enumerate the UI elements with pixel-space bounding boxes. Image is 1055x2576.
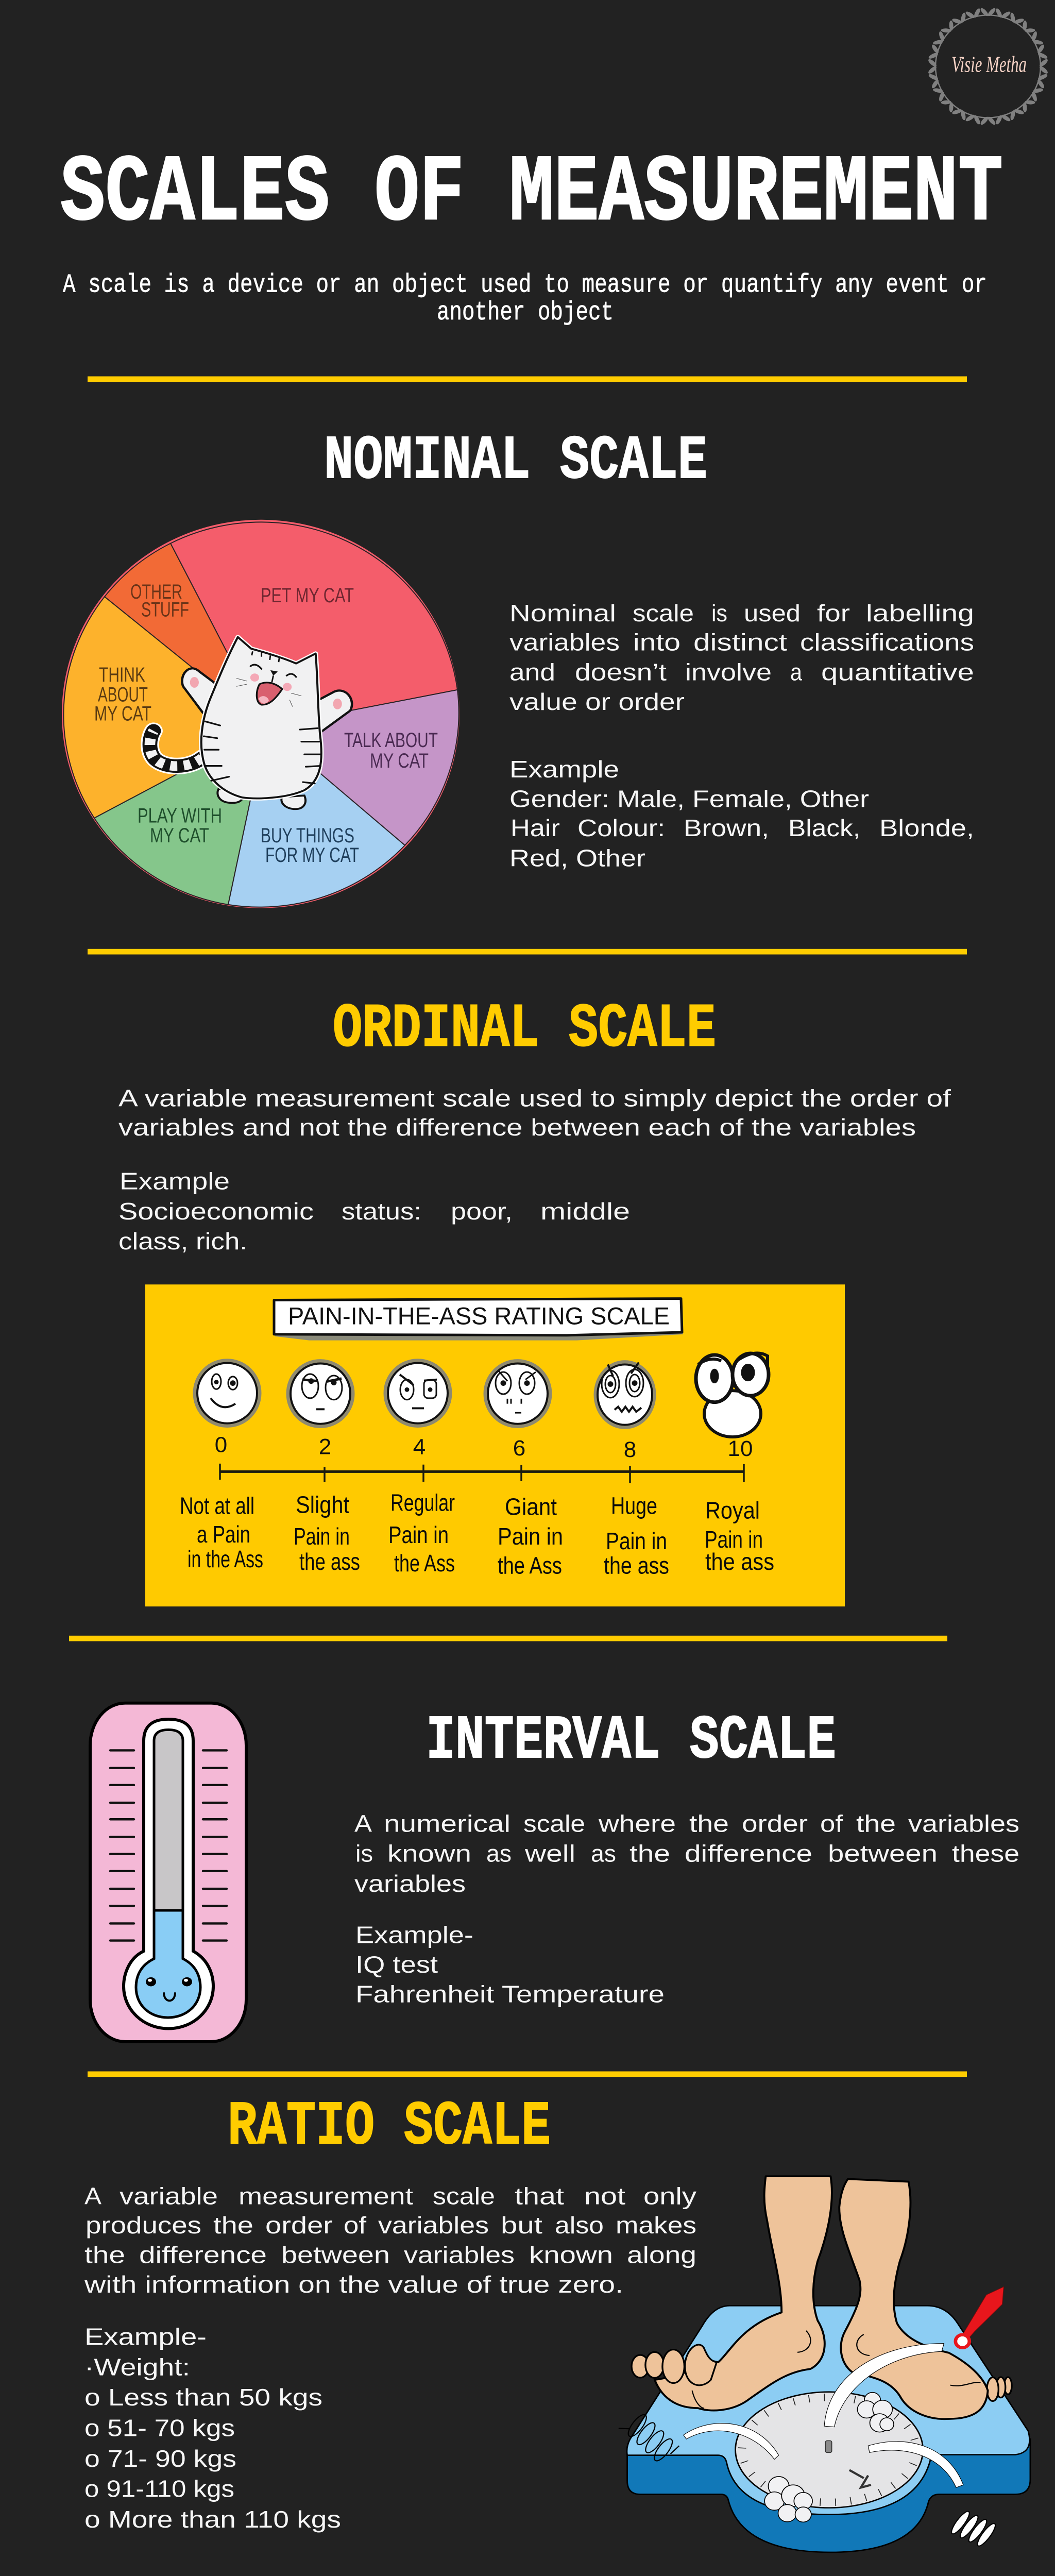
scale labels: Royal <box>705 1497 760 1523</box>
text: ratio scale description: not <box>584 2183 625 2209</box>
pie chart: cat activities: OTHER <box>130 580 182 603</box>
text: interval scale description: well <box>524 1840 575 1867</box>
text: interval scale description: is <box>355 1840 373 1867</box>
heading: ordinal scale: ORDINAL SCALE <box>333 994 716 1064</box>
scale labels: in the Ass <box>188 1546 263 1572</box>
text: ratio scale description: order <box>265 2212 333 2239</box>
text: interval scale description: Example- <box>355 1922 473 1948</box>
scale numbers <box>215 1433 753 1462</box>
icon: broken bathroom scale with feet <box>619 2176 1030 2552</box>
text: interval scale description: order <box>742 1810 808 1837</box>
pie chart: cat activities: PET MY CAT <box>261 583 354 607</box>
text: nominal scale description: Red, Other <box>509 845 645 872</box>
text: ratio scale description: the <box>213 2212 253 2239</box>
text: interval scale description: known <box>387 1840 471 1867</box>
text: interval scale description: as <box>591 1840 616 1867</box>
icon: thermometer <box>90 1703 246 2042</box>
text: ordinal scale description: class, rich. <box>118 1228 247 1255</box>
text: ordinal scale description: variables and not the difference between each of the variables <box>118 1114 916 1141</box>
text: nominal scale description: Hair <box>511 815 560 841</box>
scale labels: Pain in <box>388 1522 449 1548</box>
text: nominal scale description: Example <box>509 756 619 783</box>
pie chart: cat activities: MY CAT <box>94 702 151 725</box>
text: ordinal scale description: Example <box>120 1168 230 1194</box>
text: ratio scale description: with information on the value of true zero. <box>84 2272 623 2298</box>
text: ratio scale description: variable <box>120 2183 218 2209</box>
text: nominal scale description: Gender: Male, Female, Other <box>509 786 869 812</box>
text: interval scale description: difference <box>685 1840 812 1867</box>
text: interval scale description: between <box>828 1840 938 1867</box>
text: ratio scale description: Example- <box>84 2324 207 2350</box>
text: interval scale description: as <box>486 1840 512 1867</box>
text: ratio scale description: o 91-110 kgs <box>84 2476 234 2502</box>
text: nominal scale description: used <box>744 600 801 626</box>
scale labels: Not at all <box>180 1493 254 1519</box>
text: interval scale description: the <box>689 1810 729 1837</box>
text: nominal scale description: involve <box>685 659 772 685</box>
text: nominal scale description: for <box>817 600 850 626</box>
text: nominal scale description: value or order <box>509 688 685 715</box>
subtitle: another object <box>437 298 614 328</box>
text: ordinal scale description: Socioeconomic <box>118 1198 314 1225</box>
text: ratio scale description: variables <box>404 2242 515 2268</box>
logo: Visie Metha wreath <box>927 7 1049 126</box>
pie chart: cat activities: TALK ABOUT <box>344 728 438 752</box>
scale numbers: 2 <box>319 1435 331 1459</box>
text: ratio scale description: along <box>627 2242 696 2268</box>
rating scale banner <box>274 1299 683 1341</box>
text: interval scale description: Fahrenheit Temperature <box>355 1981 665 2008</box>
text: ratio scale description: also <box>555 2212 604 2239</box>
pie chart: cat activities <box>62 520 460 908</box>
scale labels: the ass <box>705 1548 774 1575</box>
text: interval scale description: A <box>354 1810 372 1837</box>
text: nominal scale description: scale <box>633 600 694 626</box>
text: ratio scale description: variables <box>378 2212 489 2239</box>
scale labels: the ass <box>604 1552 669 1579</box>
text: ratio scale description: makes <box>616 2212 696 2239</box>
text: nominal scale description: is <box>711 600 727 626</box>
text: interval scale description: the <box>629 1840 670 1867</box>
text: nominal scale description: and <box>509 659 555 685</box>
scale labels <box>180 1489 774 1579</box>
text: ratio scale description: difference <box>139 2242 267 2268</box>
needle <box>956 2287 1003 2348</box>
text: interval scale description: of <box>820 1810 843 1837</box>
text: ordinal scale description: middle <box>540 1198 630 1225</box>
text: ratio scale description: scale <box>433 2183 495 2209</box>
scale axis <box>220 1464 744 1483</box>
pie chart: cat activities: ABOUT <box>98 683 148 706</box>
scale labels: the Ass <box>498 1552 562 1579</box>
text: nominal scale description: Blonde, <box>879 815 974 841</box>
pie chart: cat activities: PLAY WITH <box>138 804 222 827</box>
scale labels: Pain in <box>606 1528 667 1554</box>
icon: happy cat <box>150 637 352 809</box>
scale labels: Regular <box>390 1489 455 1516</box>
flying parts <box>619 2344 998 2548</box>
scale labels: Pain in <box>705 1526 763 1553</box>
panel: pain rating scale <box>145 1284 845 1606</box>
pie chart: cat activities: MY CAT <box>150 823 209 847</box>
faces row <box>195 1353 769 1437</box>
pie chart: cat activities: FOR MY CAT <box>265 843 359 867</box>
scale numbers: 8 <box>624 1438 636 1462</box>
text: ratio scale description: produces <box>86 2212 201 2239</box>
text: ratio scale description: the <box>84 2242 125 2268</box>
text: ratio scale description: known <box>529 2242 613 2268</box>
subtitle <box>63 270 987 328</box>
scale numbers: 6 <box>513 1436 525 1461</box>
scale labels: Pain in <box>294 1523 350 1550</box>
text: ordinal scale description: A variable measurement scale used to simply depict the order of <box>118 1085 951 1111</box>
text: ratio scale description: o 71- 90 kgs <box>84 2446 236 2472</box>
text: nominal scale description: quantitative <box>821 659 974 685</box>
right foot <box>839 2179 1012 2419</box>
text: ordinal scale description: poor, <box>451 1198 513 1225</box>
text: interval scale description: variables <box>354 1870 466 1897</box>
text: nominal scale description: Brown, <box>684 815 769 841</box>
scale numbers: 0 <box>215 1433 227 1457</box>
text: nominal scale description: Colour: <box>577 815 665 841</box>
scale labels: a Pain <box>197 1521 250 1548</box>
text: nominal scale description: distinct <box>693 629 787 656</box>
scale labels: Pain in <box>498 1523 563 1550</box>
left foot <box>632 2176 832 2411</box>
scale labels: the Ass <box>394 1550 455 1577</box>
text: ratio scale description: ·Weight: <box>84 2354 190 2380</box>
pie chart: cat activities: THINK <box>99 663 145 686</box>
heading: nominal scale: NOMINAL SCALE <box>324 426 707 496</box>
text: nominal scale description <box>509 600 974 872</box>
text: ratio scale description: measurement <box>239 2183 413 2209</box>
text: interval scale description: where <box>598 1810 676 1837</box>
text: ratio scale description: A <box>84 2183 101 2209</box>
text: interval scale description: IQ test <box>355 1952 438 1978</box>
text: ratio scale description: but <box>501 2212 542 2239</box>
heading: ratio scale: RATIO SCALE <box>228 2092 551 2162</box>
text: nominal scale description: labelling <box>866 600 974 626</box>
heading: interval scale: INTERVAL SCALE <box>426 1706 836 1776</box>
text: ratio scale description: only <box>643 2183 697 2209</box>
text: interval scale description: numerical <box>384 1810 511 1837</box>
dial <box>736 2392 923 2508</box>
text: nominal scale description: doesn’t <box>575 659 667 685</box>
text: nominal scale description: into <box>633 629 680 656</box>
text: nominal scale description: classifications <box>800 629 974 656</box>
scale labels: Huge <box>611 1493 657 1519</box>
text: interval scale description: the <box>856 1810 896 1837</box>
text: interval scale description: these <box>952 1840 1019 1867</box>
text: ratio scale description: that <box>515 2183 564 2209</box>
text: interval scale description: variables <box>908 1810 1019 1837</box>
scale labels: the ass <box>299 1548 360 1575</box>
text: nominal scale description: variables <box>509 629 620 656</box>
text: ordinal scale description: status: <box>342 1198 421 1225</box>
text: nominal scale description: a <box>790 659 802 685</box>
pie chart: cat activities: BUY THINGS <box>261 823 354 847</box>
text: ratio scale description: o 51- 70 kgs <box>84 2415 235 2441</box>
text: ratio scale description <box>84 2183 697 2533</box>
text: interval scale description <box>354 1810 1019 2008</box>
text: interval scale description: scale <box>523 1810 585 1837</box>
text: ordinal scale description <box>118 1085 951 1255</box>
pie chart: cat activities: STUFF <box>141 598 189 621</box>
scale numbers: 10 <box>728 1437 753 1461</box>
scale labels: Slight <box>296 1492 349 1518</box>
text: nominal scale description: Black, <box>788 815 860 841</box>
pie chart: cat activities: MY CAT <box>370 749 429 772</box>
text: nominal scale description: Nominal <box>509 600 616 626</box>
text: ratio scale description: o More than 110 kgs <box>84 2506 341 2533</box>
scale numbers: 4 <box>413 1435 426 1459</box>
text: ratio scale description: o Less than 50 kgs <box>84 2384 322 2411</box>
scale labels: Giant <box>505 1494 557 1520</box>
text: ratio scale description: between <box>281 2242 390 2268</box>
rating scale banner: PAIN-IN-THE-ASS RATING SCALE <box>288 1303 670 1330</box>
text: ratio scale description: of <box>344 2212 366 2239</box>
